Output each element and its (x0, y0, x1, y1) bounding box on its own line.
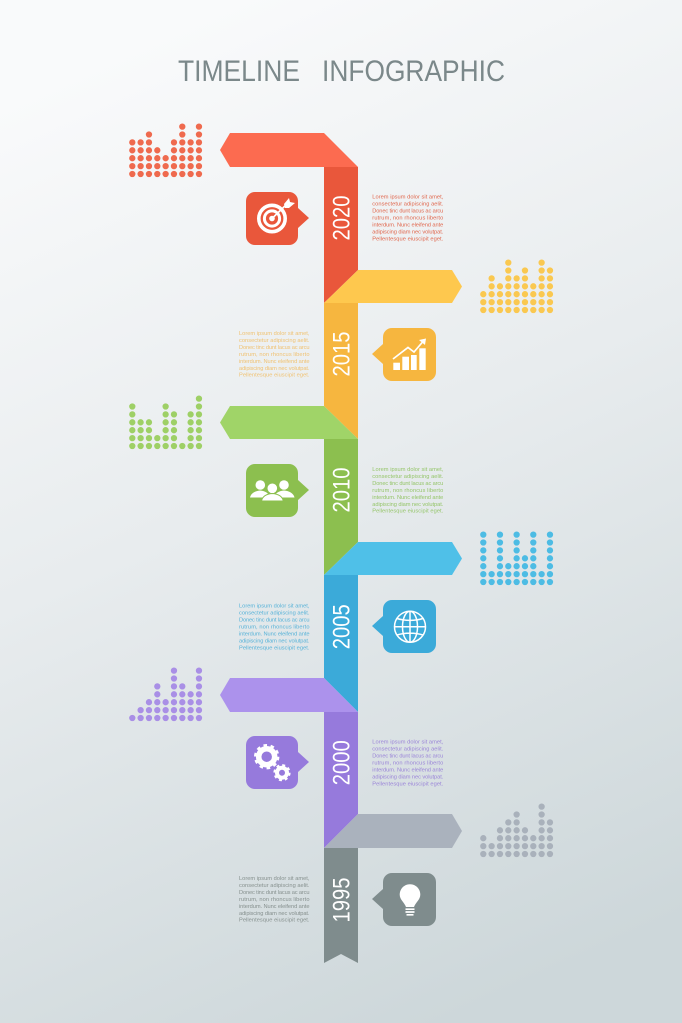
ribbon segment: orange (324, 303, 358, 439)
text block: 2010 (372, 467, 444, 515)
text block: 1995 (239, 876, 310, 924)
text block: 2015: adipiscing diam nec volutpat. (239, 366, 310, 372)
text block: 2010: Pellentesque eiuscipit eget. (372, 509, 444, 515)
text block: 1995: adipiscing diam nec volutpat. (239, 911, 310, 917)
text block: 2005: Lorem ipsum dolor sit amet, (239, 604, 310, 610)
banner: blue (324, 542, 462, 575)
text block: 2000: Lorem ipsum dolor sit amet, (372, 740, 444, 746)
text block: 2020 (372, 195, 444, 242)
title (178, 55, 505, 88)
text block: 1995: Pellentesque eiuscipit eget. (239, 918, 310, 924)
title: TIMELINE (178, 55, 300, 88)
icon: globe speech bubble (372, 600, 436, 653)
dot chart: red (132, 124, 199, 174)
dot chart: blue (483, 532, 550, 582)
dot chart: green (132, 396, 199, 446)
icon: growth chart speech bubble (372, 328, 436, 381)
text block: 2000: Donec tinc dunt lacus ac arcu (372, 754, 443, 760)
ribbon segment: purple (324, 712, 358, 848)
text block: 2000: rutrum, non rhoncus liberto (372, 761, 443, 767)
text block: 2005: interdum. Nunc eleifend ante (239, 632, 310, 638)
text block: 2020: adipiscing diam nec volutpat. (372, 230, 444, 236)
text block: 2015: Donec tinc dunt lacus ac arcu (239, 345, 310, 351)
text block: 2005: consectetur adipiscing aelit. (239, 611, 310, 617)
ribbon segment: red (324, 167, 358, 303)
text block: 2005 (239, 604, 310, 651)
text block: 2010: rutrum, non rhoncus liberto (372, 488, 443, 494)
banner: purple (220, 678, 358, 712)
text block: 2010: Donec tinc dunt lacus ac arcu (372, 481, 443, 487)
text block: 1995: consectetur adipiscing aelit. (239, 883, 310, 889)
banner: yellow (324, 270, 462, 303)
icon: people speech bubble (246, 464, 309, 517)
text block: 2005: rutrum, non rhoncus liberto (239, 625, 310, 631)
panel: 2015 milestone (239, 260, 550, 439)
text block: 2000: interdum. Nunc eleifend ante (372, 768, 443, 774)
panel: 1995 milestone (239, 804, 550, 963)
panel: 2010 milestone (132, 396, 444, 575)
text block: 2010: interdum. Nunc eleifend ante (372, 495, 443, 501)
banner: green (220, 406, 358, 439)
icon: gears speech bubble (246, 736, 309, 789)
dot chart: gray (483, 804, 550, 854)
text block: 2005: adipiscing diam nec volutpat. (239, 638, 310, 644)
icon: target speech bubble (246, 192, 309, 245)
text block: 2020: consectetur adipiscing aelit. (372, 202, 444, 208)
text block: 2000: Pellentesque eiuscipit eget. (372, 781, 444, 787)
title: INFOGRAPHIC (322, 55, 505, 88)
text block: 2000: adipiscing diam nec volutpat. (372, 774, 444, 780)
year: 2020: 2020 (328, 196, 355, 240)
banner: red (220, 133, 358, 167)
panel: 2000 milestone (132, 668, 444, 848)
dot chart: purple (132, 668, 199, 718)
text block: 2020: Pellentesque eiuscipit eget. (372, 236, 444, 242)
year: 2000: 2000 (328, 740, 355, 785)
dot chart: yellow (483, 260, 550, 310)
text block: 1995: Lorem ipsum dolor sit amet, (239, 876, 310, 882)
panel: 2005 milestone (239, 532, 550, 712)
text block: 2010: consectetur adipiscing aelit. (372, 474, 444, 480)
year: 1995: 1995 (328, 878, 355, 922)
panel: 2020 milestone (132, 124, 444, 303)
year: 2005: 2005 (328, 604, 355, 649)
ribbon segment: green (324, 439, 358, 575)
text block: 2010: Lorem ipsum dolor sit amet, (372, 467, 444, 473)
text block: 2005: Pellentesque eiuscipit eget. (239, 645, 310, 651)
text block: 1995: rutrum, non rhoncus liberto (239, 897, 310, 903)
year: 2010: 2010 (328, 468, 355, 512)
year: 2015: 2015 (328, 332, 355, 376)
text block: 1995: interdum. Nunc eleifend ante (239, 904, 310, 910)
text block: 2015: Lorem ipsum dolor sit amet, (239, 331, 310, 337)
text block: 1995: Donec tinc dunt lacus ac arcu (239, 890, 310, 896)
banner: gray (324, 814, 462, 848)
text block: 2015: Pellentesque eiuscipit eget. (239, 373, 310, 379)
text block: 2010: adipiscing diam nec volutpat. (372, 502, 444, 508)
text block: 2015: rutrum, non rhoncus liberto (239, 352, 310, 358)
text block: 2000 (372, 740, 444, 787)
text block: 2000: consectetur adipiscing aelit. (372, 747, 444, 753)
text block: 2020: Lorem ipsum dolor sit amet, (372, 195, 444, 201)
text block: 2020: interdum. Nunc eleifend ante (372, 222, 443, 228)
ribbon segment: blue (324, 575, 358, 712)
text block: 2005: Donec tinc dunt lacus ac arcu (239, 618, 310, 624)
text block: 2015: consectetur adipiscing aelit. (239, 338, 310, 344)
icon: light bulb speech bubble (372, 873, 436, 926)
text block: 2020: rutrum, non rhoncus liberto (372, 216, 443, 222)
text block: 2015 (239, 331, 310, 379)
ribbon segment: gray with swallowtail end (324, 848, 358, 963)
text block: 2015: interdum. Nunc eleifend ante (239, 359, 310, 365)
text block: 2020: Donec tinc dunt lacus ac arcu (372, 209, 443, 215)
